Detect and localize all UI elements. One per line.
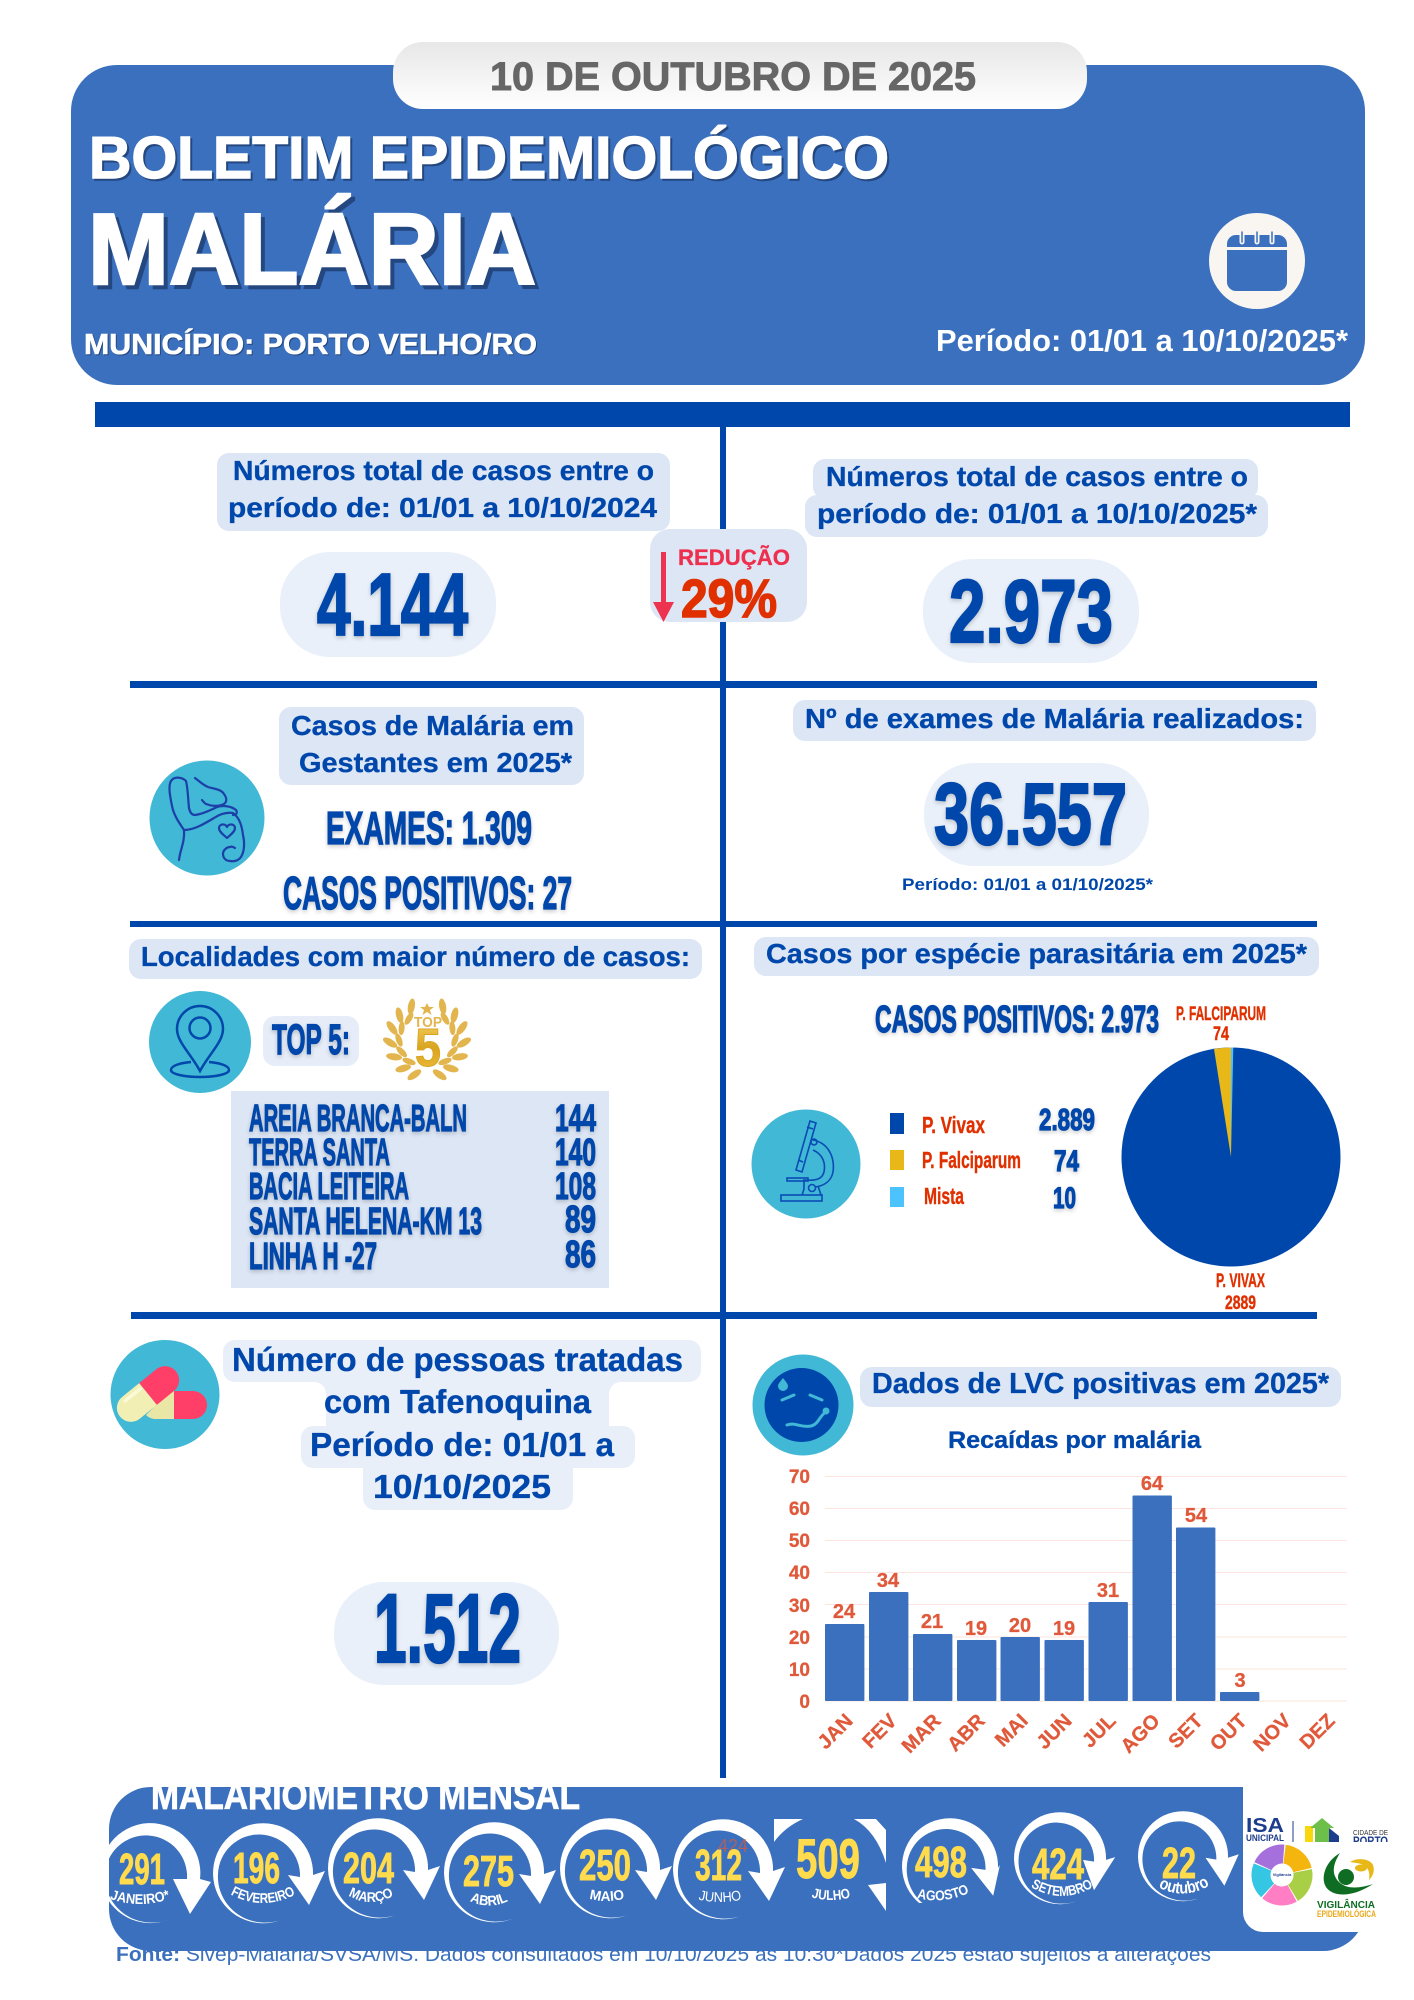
title: malária: MALÁRIA: [88, 194, 536, 306]
bar chart: relapses: 0: [799, 1692, 810, 1713]
table: top 5 localities: 89: [565, 1199, 596, 1241]
logo: department wheel: Vigilância: [1273, 1872, 1292, 1877]
month: junho: 312: [695, 1841, 742, 1890]
pie chart: P. FALCIPARUM: [1176, 1004, 1266, 1025]
month: abril: [444, 1822, 556, 1922]
logo: vigilancia epidemiologica: [1317, 1853, 1376, 1919]
bar chart: relapses: JUN: [1033, 1710, 1077, 1754]
pie chart: 2889: [1225, 1293, 1256, 1314]
number: 4.144: [280, 552, 496, 657]
bar chart: relapses: 54: [1185, 1505, 1208, 1527]
panel: cases 2025: [805, 459, 1268, 663]
icon: microscope: [752, 1110, 860, 1218]
table: top 5 localities: [231, 1091, 609, 1288]
top 5 label: TOP 5:: [272, 1016, 350, 1064]
bar chart: relapses: FEV: [858, 1710, 902, 1753]
month: marco: 204: [343, 1844, 394, 1893]
icon: sick face: [752, 1354, 854, 1456]
footer source note: Fonte: Sivep-Malária/SVSA/MS. Dados consultados em 10/10/2025 às 10:30*Dados 2025 estão sujeitos a alterações: [116, 1944, 1211, 1966]
icon: top 5 laurel badge: TOP: [414, 1014, 442, 1031]
icon: calendar: [1209, 213, 1305, 309]
number: 1.512: [334, 1574, 559, 1685]
bar chart: relapses: 34: [877, 1570, 900, 1592]
panel: LVC relapses: [752, 1354, 1347, 1758]
table: top 5 localities: 140: [555, 1132, 596, 1174]
period: Período: 01/01 a 10/10/2025*: [936, 323, 1349, 358]
panel: exams performed: Nº de exames de Malária realizados:: [805, 703, 1304, 734]
pie chart: [1122, 1004, 1340, 1314]
month: fevereiro: [213, 1823, 325, 1924]
pie chart: 74: [1213, 1024, 1229, 1045]
bar chart: relapses: 10: [789, 1660, 810, 1681]
month: marco: MARÇO: [348, 1887, 392, 1904]
pie chart: P. VIVAX: [1216, 1271, 1265, 1292]
icon: location pin: [149, 991, 251, 1093]
panel: tafenoquine: Número de pessoas tratadas: [232, 1341, 683, 1378]
bar chart: relapses: 24: [833, 1601, 856, 1623]
panel: tafenoquine: [110, 1340, 701, 1685]
month: setembro: [1014, 1812, 1116, 1904]
month: agosto: 498: [915, 1838, 967, 1887]
panel: cases 2024: Números total de casos entre o: [233, 455, 654, 486]
month: maio: 250: [579, 1841, 631, 1890]
table: top 5 localities: 108: [555, 1166, 596, 1208]
panel: LVC relapses: Dados de LVC positivas em 2025*: [872, 1368, 1330, 1400]
month: abril: 275: [463, 1847, 514, 1896]
bar chart: relapses: 31: [1097, 1580, 1119, 1602]
panel: pregnant women: [150, 707, 584, 919]
month: janeiro: JANEIRO*: [110, 1890, 168, 1904]
period note: Período: 01/01 a 01/10/2025*: [902, 875, 1153, 894]
callout: reduction 29%: 29%: [681, 569, 777, 629]
panel: cases by parasite species: Casos por espécie parasitária em 2025*: [766, 938, 1307, 969]
month: julho: 509: [796, 1827, 860, 1890]
title: boletim: BOLETIM EPIDEMIOLÓGICO: [89, 125, 889, 191]
bar chart: relapses: 3: [1234, 1670, 1246, 1692]
panel: pregnant women: Gestantes em 2025*: [299, 747, 572, 778]
bar chart: relapses: 21: [921, 1611, 943, 1633]
legend: P. Vivax: [922, 1112, 985, 1138]
table: top 5 localities: 144: [555, 1098, 596, 1140]
bar chart: relapses: 50: [789, 1531, 810, 1552]
month: marco: [328, 1818, 440, 1918]
arrow: down: [653, 552, 674, 622]
month: setembro: 424: [1032, 1840, 1084, 1889]
panel: localities: Localidades com maior número de casos:: [141, 941, 690, 972]
panel: cases by parasite species: [752, 937, 1340, 1314]
table: top 5 localities: LINHA H -27: [249, 1236, 377, 1278]
panel: cases 2025: Números total de casos entre o: [826, 461, 1248, 492]
number: 2.973: 2.973: [949, 561, 1113, 661]
month: fevereiro: FEVEREIRO: [231, 1886, 294, 1903]
bar chart: relapses: AGO: [1117, 1710, 1165, 1758]
number: 1.512: 1.512: [374, 1574, 521, 1683]
month: setembro: SETEMBRO: [1032, 1880, 1092, 1896]
month: junho: [673, 1819, 785, 1920]
logo: vigilancia epidemiologica: EPIDEMIOLÓGICA: [1317, 1908, 1376, 1919]
bar chart: relapses: 70: [789, 1467, 810, 1488]
partner logos top row: PORTO: [1353, 1834, 1388, 1848]
partner logos top row: [1246, 1818, 1388, 1842]
panel: exams performed: [793, 700, 1316, 894]
bar chart: relapses: 19: [1053, 1618, 1075, 1640]
divider lines: [95, 402, 1350, 1778]
number: 36.557: 36.557: [934, 766, 1127, 863]
exams count: EXAMES: 1.309: [326, 802, 532, 854]
table: top 5 localities: SANTA HELENA-KM 13: [249, 1201, 482, 1243]
bar chart: relapses: 19: [965, 1618, 987, 1640]
partner logos top row: UNICIPAL: [1246, 1833, 1284, 1843]
month: outubro: outubro: [1160, 1878, 1208, 1894]
icon: top 5 laurel badge: 5: [415, 1018, 441, 1078]
panel: cases 2025: período de: 01/01 a 10/10/2025*: [817, 498, 1257, 529]
legend: 74: [1054, 1145, 1079, 1178]
bar chart: relapses: OUT: [1206, 1710, 1252, 1755]
positive cases count: CASOS POSITIVOS: 27: [283, 867, 572, 919]
logo: department wheel: [1252, 1845, 1312, 1905]
bar chart: relapses: ABR: [943, 1710, 990, 1756]
month: janeiro: 291: [119, 1845, 165, 1894]
panel: cases 2024: período de: 01/01 a 10/10/2024: [228, 492, 657, 523]
month: abril: ABRIL: [470, 1893, 508, 1906]
month: junho: 424: [718, 1836, 748, 1856]
bar chart: relapses: 60: [789, 1499, 810, 1520]
panel: tafenoquine: com Tafenoquina: [324, 1383, 592, 1420]
month: julho: [774, 1819, 886, 1911]
bar chart: relapses: 40: [789, 1563, 810, 1584]
panel: tafenoquine: 10/10/2025: [373, 1468, 551, 1505]
table: top 5 localities: AREIA BRANCA-BALN: [249, 1098, 467, 1140]
bar chart: relapses: NOV: [1249, 1710, 1296, 1756]
icon: pregnant woman: [150, 760, 264, 876]
legend: P. Falciparum: [922, 1147, 1021, 1173]
panel: tafenoquine: Período de: 01/01 a: [310, 1426, 615, 1463]
partner logos top row: ISA: [1246, 1815, 1284, 1837]
callout: reduction 29%: [650, 529, 807, 629]
month: julho: JULHO: [812, 1888, 850, 1900]
bar chart: relapses: DEZ: [1296, 1710, 1340, 1754]
malariometer title: MALARIOMETRO MENSAL: [151, 1775, 580, 1818]
header panel: [71, 42, 1365, 385]
bar chart: relapses: 20: [789, 1628, 810, 1649]
top 5 label: [263, 1016, 359, 1066]
table: top 5 localities: TERRA SANTA: [249, 1132, 390, 1174]
date pill: [393, 42, 1087, 109]
bar chart: relapses: 20: [1009, 1615, 1031, 1637]
date pill: 10 DE OUTUBRO DE 2025: [490, 55, 976, 99]
month: agosto: [902, 1818, 1000, 1903]
panel: pregnant women: Casos de Malária em: [291, 710, 574, 741]
bar chart: relapses: JAN: [814, 1710, 858, 1754]
icon: pills: [110, 1340, 220, 1449]
legend: 2.889: [1039, 1102, 1095, 1137]
panel: cases 2024: [217, 453, 670, 657]
icon: top 5 laurel badge: [381, 998, 473, 1082]
table: top 5 localities: BACIA LEITEIRA: [249, 1166, 409, 1208]
month: janeiro: [109, 1823, 211, 1924]
logo: vigilancia epidemiologica: VIGILÂNCIA: [1317, 1898, 1375, 1911]
bar chart: relapses: JUL: [1078, 1710, 1121, 1752]
legend: [890, 1102, 1095, 1215]
bar chart: relapses: MAI: [991, 1710, 1033, 1751]
logo panel: [1243, 1783, 1393, 1932]
month: outubro: [1138, 1811, 1239, 1902]
month: junho: JUNHO: [698, 1890, 740, 1902]
bar chart: relapses: Recaídas por malária: [948, 1427, 1202, 1454]
bar chart: relapses: 64: [1141, 1473, 1164, 1495]
bar chart: relapses: MAR: [898, 1710, 946, 1758]
legend: 10: [1053, 1182, 1076, 1215]
partner logos top row: CIDADE DE: [1353, 1830, 1388, 1837]
bar chart: relapses: 30: [789, 1596, 810, 1617]
callout: reduction 29%: REDUÇÃO: [678, 545, 790, 570]
panel: localities: [129, 939, 702, 1288]
month: maio: MAIO: [590, 1890, 624, 1902]
municipality: MUNICÍPIO: PORTO VELHO/RO: [84, 327, 537, 361]
month: outubro: 22: [1162, 1839, 1196, 1888]
panel: monthly malariometer: [109, 1787, 1358, 1951]
bar chart: relapses: [789, 1427, 1347, 1758]
number: 4.144: 4.144: [317, 555, 468, 654]
table: top 5 localities: 86: [565, 1234, 596, 1276]
month: agosto: AGOSTO: [917, 1885, 968, 1900]
legend: Mista: [924, 1183, 964, 1209]
month: maio: [560, 1818, 672, 1918]
bar chart: relapses: SET: [1164, 1710, 1208, 1753]
month: fevereiro: 196: [233, 1844, 280, 1893]
positive cases total: CASOS POSITIVOS: 2.973: [875, 999, 1159, 1041]
